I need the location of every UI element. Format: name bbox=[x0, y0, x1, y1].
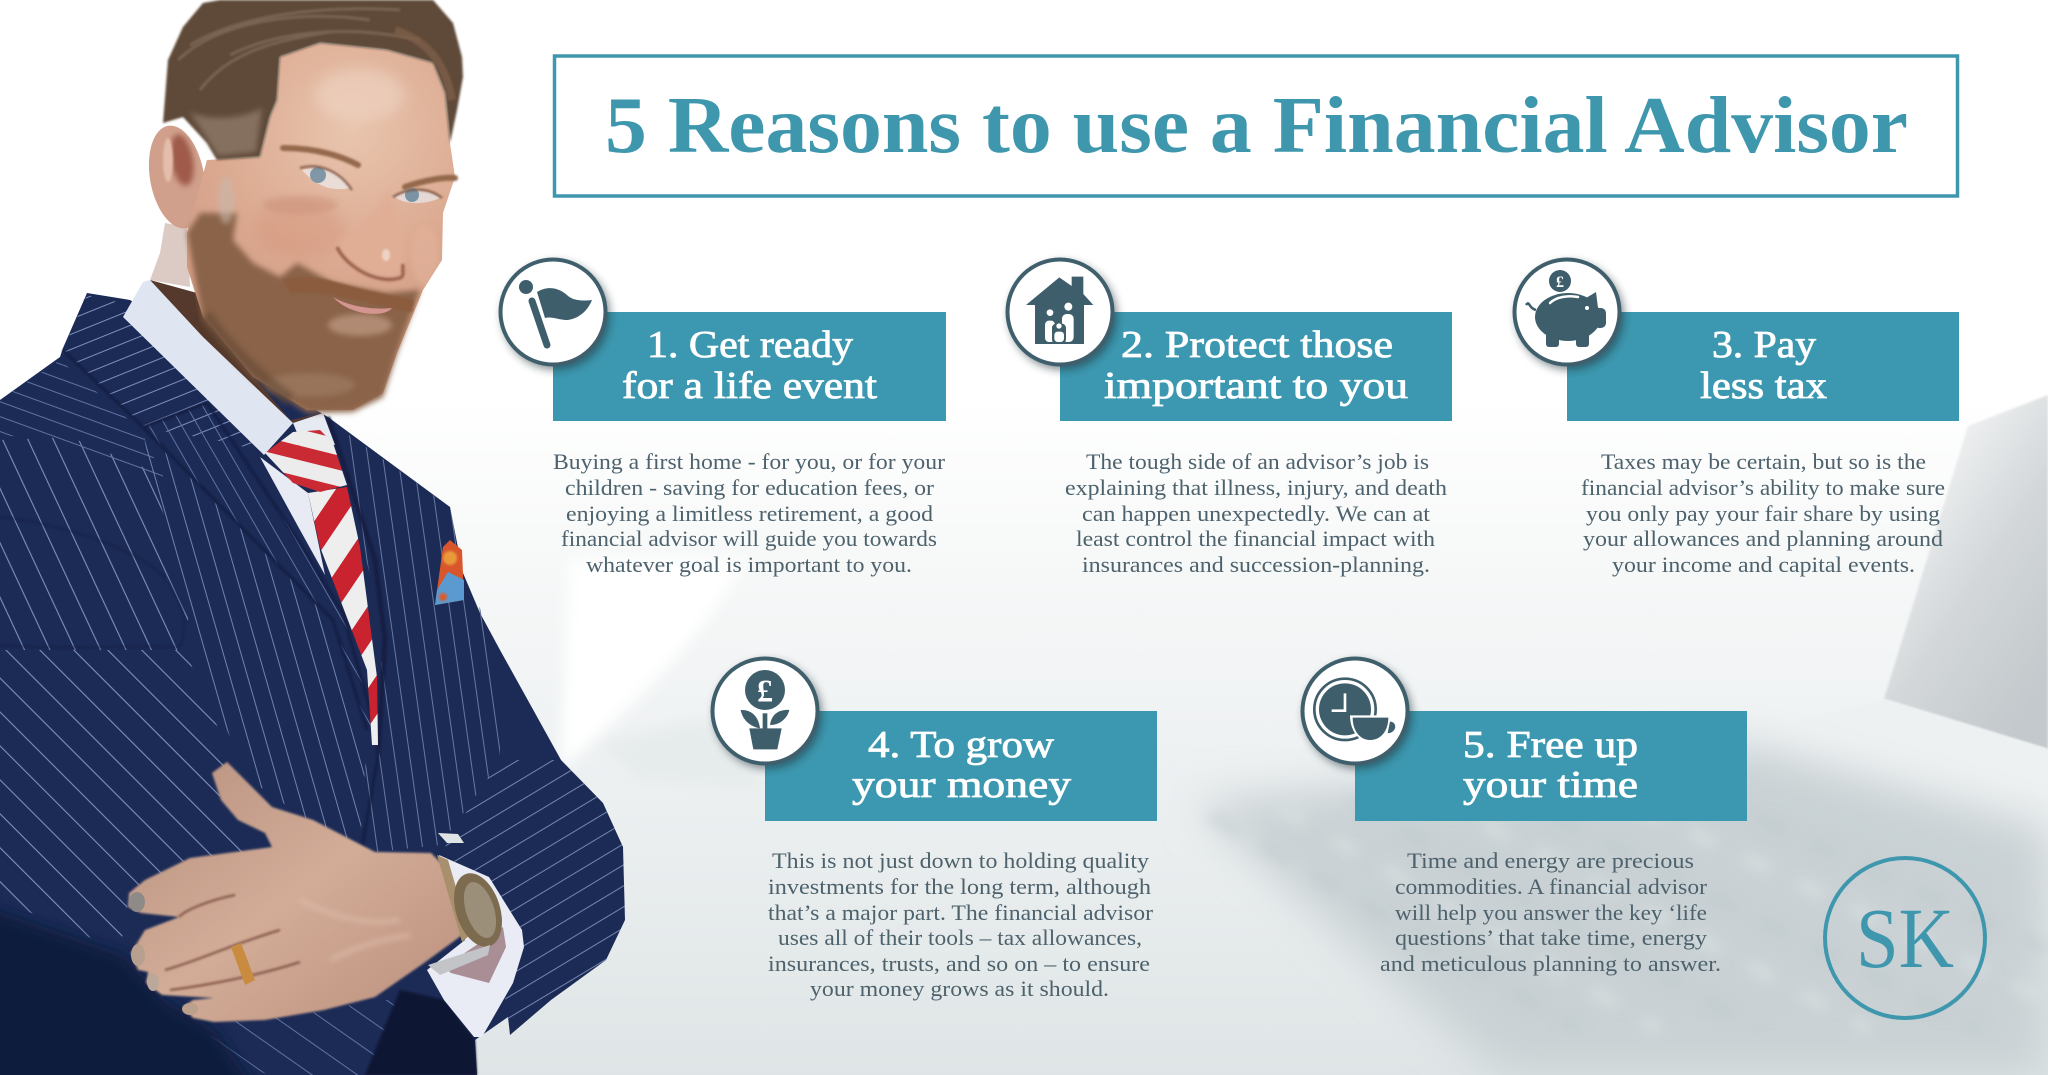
icon: family house bbox=[1008, 260, 1112, 364]
heading: your time bbox=[1463, 764, 1638, 806]
body text: will help you answer the key ‘life bbox=[1395, 900, 1707, 925]
heading: your money bbox=[852, 764, 1071, 806]
logo: SK monogram: SK bbox=[1856, 890, 1954, 986]
heading: less tax bbox=[1700, 365, 1827, 407]
ear bbox=[141, 121, 213, 233]
icon: money plant: £ bbox=[757, 673, 773, 709]
body text: insurances, trusts, and so on – to ensure bbox=[768, 951, 1150, 976]
banner bbox=[1355, 711, 1747, 821]
body text: Taxes may be certain, but so is the bbox=[1601, 449, 1926, 474]
heading: for a life event bbox=[622, 365, 877, 407]
body text: commodities. A financial advisor bbox=[1395, 874, 1708, 899]
shirt collar bbox=[123, 280, 335, 575]
body text: Buying a first home - for you, or for your bbox=[553, 449, 946, 474]
jacket bbox=[0, 293, 625, 1075]
body text: financial advisor’s ability to make sure bbox=[1581, 475, 1945, 500]
title: 5 Reasons to use a Financial Advisor bbox=[605, 80, 1908, 170]
body text bbox=[1380, 848, 1721, 976]
hair bbox=[163, 0, 463, 160]
heading bbox=[622, 324, 877, 407]
body text: investments for the long term, although bbox=[768, 874, 1151, 899]
body text: your allowances and planning around bbox=[1583, 526, 1943, 551]
face bbox=[187, 43, 455, 410]
body text: and meticulous planning to answer. bbox=[1380, 951, 1721, 976]
wristwatch bbox=[428, 855, 511, 975]
panel: reason 2 bbox=[1008, 260, 1452, 577]
body text: This is not just down to holding quality bbox=[772, 848, 1150, 873]
body text: explaining that illness, injury, and death bbox=[1065, 475, 1447, 500]
panel: reason 5 bbox=[1302, 658, 1747, 976]
body text: can happen unexpectedly. We can at bbox=[1082, 501, 1431, 526]
icon: money plant bbox=[712, 658, 818, 764]
pocket square bbox=[435, 540, 464, 605]
body text: insurances and succession-planning. bbox=[1082, 552, 1430, 577]
heading bbox=[1104, 324, 1408, 407]
body text: The tough side of an advisor’s job is bbox=[1086, 449, 1429, 474]
body text: your income and capital events. bbox=[1612, 552, 1915, 577]
banner bbox=[553, 312, 946, 421]
banner bbox=[1060, 312, 1452, 421]
body text bbox=[768, 848, 1154, 1001]
body text: Time and energy are precious bbox=[1407, 848, 1694, 873]
gold ring bbox=[231, 943, 255, 985]
panel: reason 3 bbox=[1514, 260, 1959, 577]
beard bbox=[187, 176, 420, 413]
icon: piggy bank: £ bbox=[1556, 274, 1564, 291]
heading bbox=[1463, 724, 1638, 806]
panel: reason 4 bbox=[712, 658, 1157, 1001]
icon: flag bbox=[500, 260, 606, 364]
portrait of the advisor bbox=[0, 0, 625, 1075]
hand bbox=[128, 762, 465, 1022]
neck bbox=[150, 223, 320, 430]
body text: uses all of their tools – tax allowances, bbox=[778, 925, 1142, 950]
heading bbox=[1700, 324, 1827, 407]
heading: 3. Pay bbox=[1712, 324, 1816, 366]
body text: financial advisor will guide you towards bbox=[561, 526, 937, 551]
heading: 5. Free up bbox=[1463, 724, 1638, 766]
heading: important to you bbox=[1104, 365, 1408, 407]
heading: 4. To grow bbox=[868, 724, 1055, 766]
body text bbox=[553, 449, 946, 577]
moustache and mouth bbox=[283, 277, 414, 314]
banner bbox=[1567, 312, 1959, 421]
panel: reason 1 bbox=[500, 260, 946, 577]
heading bbox=[852, 724, 1071, 806]
heading: 1. Get ready bbox=[647, 324, 853, 366]
icon: clock and cup bbox=[1302, 658, 1408, 764]
body text: least control the financial impact with bbox=[1076, 526, 1435, 551]
body text bbox=[1581, 449, 1945, 577]
cuff bbox=[427, 855, 524, 1037]
body text: you only pay your fair share by using bbox=[1586, 501, 1940, 526]
body text bbox=[1065, 449, 1447, 577]
eyes and brows bbox=[283, 148, 455, 203]
body text: enjoying a limitless retirement, a good bbox=[566, 501, 933, 526]
logo: SK monogram bbox=[1825, 858, 1985, 1018]
icon: piggy bank bbox=[1514, 260, 1620, 364]
banner bbox=[765, 711, 1157, 821]
body text: whatever goal is important to you. bbox=[586, 552, 912, 577]
body text: children - saving for education fees, or bbox=[565, 475, 935, 500]
nose bbox=[337, 190, 404, 279]
heading: 2. Protect those bbox=[1121, 324, 1393, 366]
striped tie bbox=[265, 430, 378, 745]
body text: questions’ that take time, energy bbox=[1395, 925, 1708, 950]
title box bbox=[554, 56, 1958, 196]
body text: your money grows as it should. bbox=[810, 976, 1109, 1001]
body text: that’s a major part. The financial advisor bbox=[768, 900, 1154, 925]
